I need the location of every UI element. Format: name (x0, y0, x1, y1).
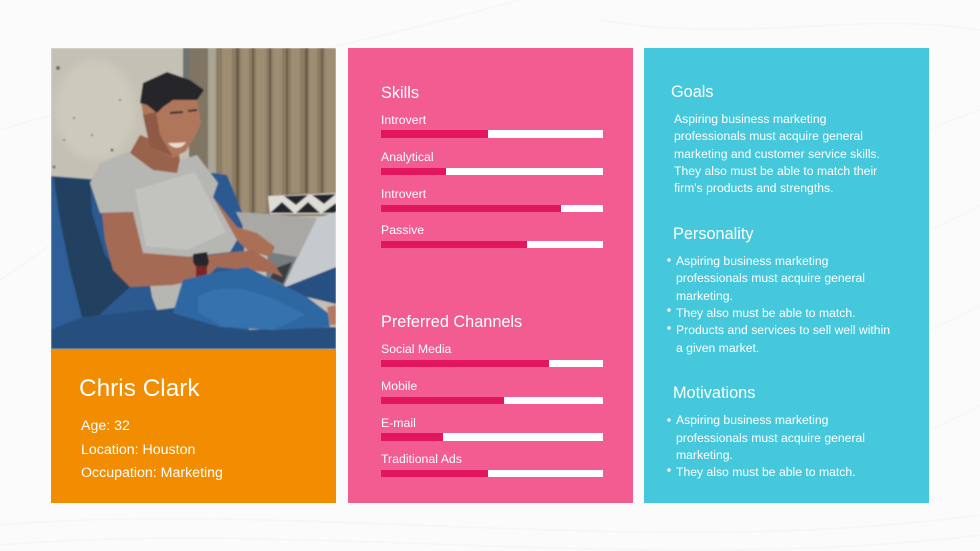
bar: social media (381, 342, 603, 367)
laptop keyboard (266, 252, 297, 288)
occupation: Occupation: Marketing (81, 465, 223, 481)
panel: profile (51, 48, 336, 503)
laptop screen (283, 212, 336, 288)
name card (51, 349, 336, 503)
list: motivations: They also must be able to match. (676, 465, 856, 479)
heading: motivations: Motivations (673, 384, 755, 402)
eyes and smile (170, 110, 197, 113)
bar: mobile (381, 379, 603, 404)
shirt (90, 152, 237, 310)
photo: man on sofa with laptop (51, 48, 336, 349)
list: personality: marketing. (676, 289, 733, 303)
heading: goals: Goals (671, 83, 714, 101)
jeans (173, 267, 330, 330)
location: Location: Houston (81, 442, 195, 458)
wall (51, 48, 336, 349)
panel: skills and channels (348, 48, 633, 503)
bar: analytical (381, 150, 603, 175)
foot (327, 305, 336, 325)
bar: analytical: Analytical (381, 150, 434, 164)
head (141, 98, 202, 158)
watch (193, 252, 209, 267)
age: Age: 32 (81, 418, 130, 434)
text: goals body: marketing and customer service skills. (674, 147, 880, 161)
bar: social media: Social Media (381, 342, 452, 356)
list: personality: a given market. (676, 341, 759, 355)
text: goals body (674, 112, 880, 195)
text: goals body: professionals must acquire general (674, 129, 863, 143)
list: motivations (667, 413, 865, 479)
list: personality: professionals must acquire general (676, 271, 865, 285)
list: personality (667, 254, 890, 355)
striped pillow (268, 193, 336, 214)
bar: e-mail (381, 416, 603, 441)
sofa (51, 173, 250, 349)
panel: goals, personality, motivations (644, 48, 929, 503)
bar: mobile: Mobile (381, 379, 417, 393)
neck (130, 135, 180, 173)
front arm (102, 212, 283, 287)
list: personality: Products and services to sell well within (676, 323, 890, 337)
heading: preferred channels: Preferred Channels (381, 313, 522, 331)
list: personality: They also must be able to match. (676, 306, 856, 320)
text: goals body: Aspiring business marketing (674, 112, 826, 126)
back leg (283, 267, 336, 304)
bar: introvert second (381, 187, 603, 212)
bar: introvert: Introvert (381, 113, 427, 127)
grey pillow (236, 212, 318, 258)
heading: personality: Personality (673, 225, 754, 243)
heading: skills: Skills (381, 84, 419, 102)
name: Chris Clark (79, 375, 200, 402)
list: motivations: marketing. (676, 448, 733, 462)
list: personality: Aspiring business marketing (676, 254, 828, 268)
curtain (216, 48, 336, 216)
text: goals body: They also must be able to match their (674, 164, 877, 178)
bar: introvert (381, 113, 603, 138)
bar: passive (381, 223, 603, 248)
list: motivations: Aspiring business marketing (676, 413, 828, 427)
bar: e-mail: E-mail (381, 416, 416, 430)
list: motivations: professionals must acquire general (676, 431, 865, 445)
text: goals body: firm's products and strengths. (674, 181, 833, 195)
hair (140, 72, 204, 113)
bar: introvert second: Introvert (381, 187, 427, 201)
bar: traditional ads (381, 452, 603, 477)
bar: traditional ads: Traditional Ads (381, 452, 462, 466)
back arm (213, 197, 275, 257)
bar: passive: Passive (381, 223, 424, 237)
